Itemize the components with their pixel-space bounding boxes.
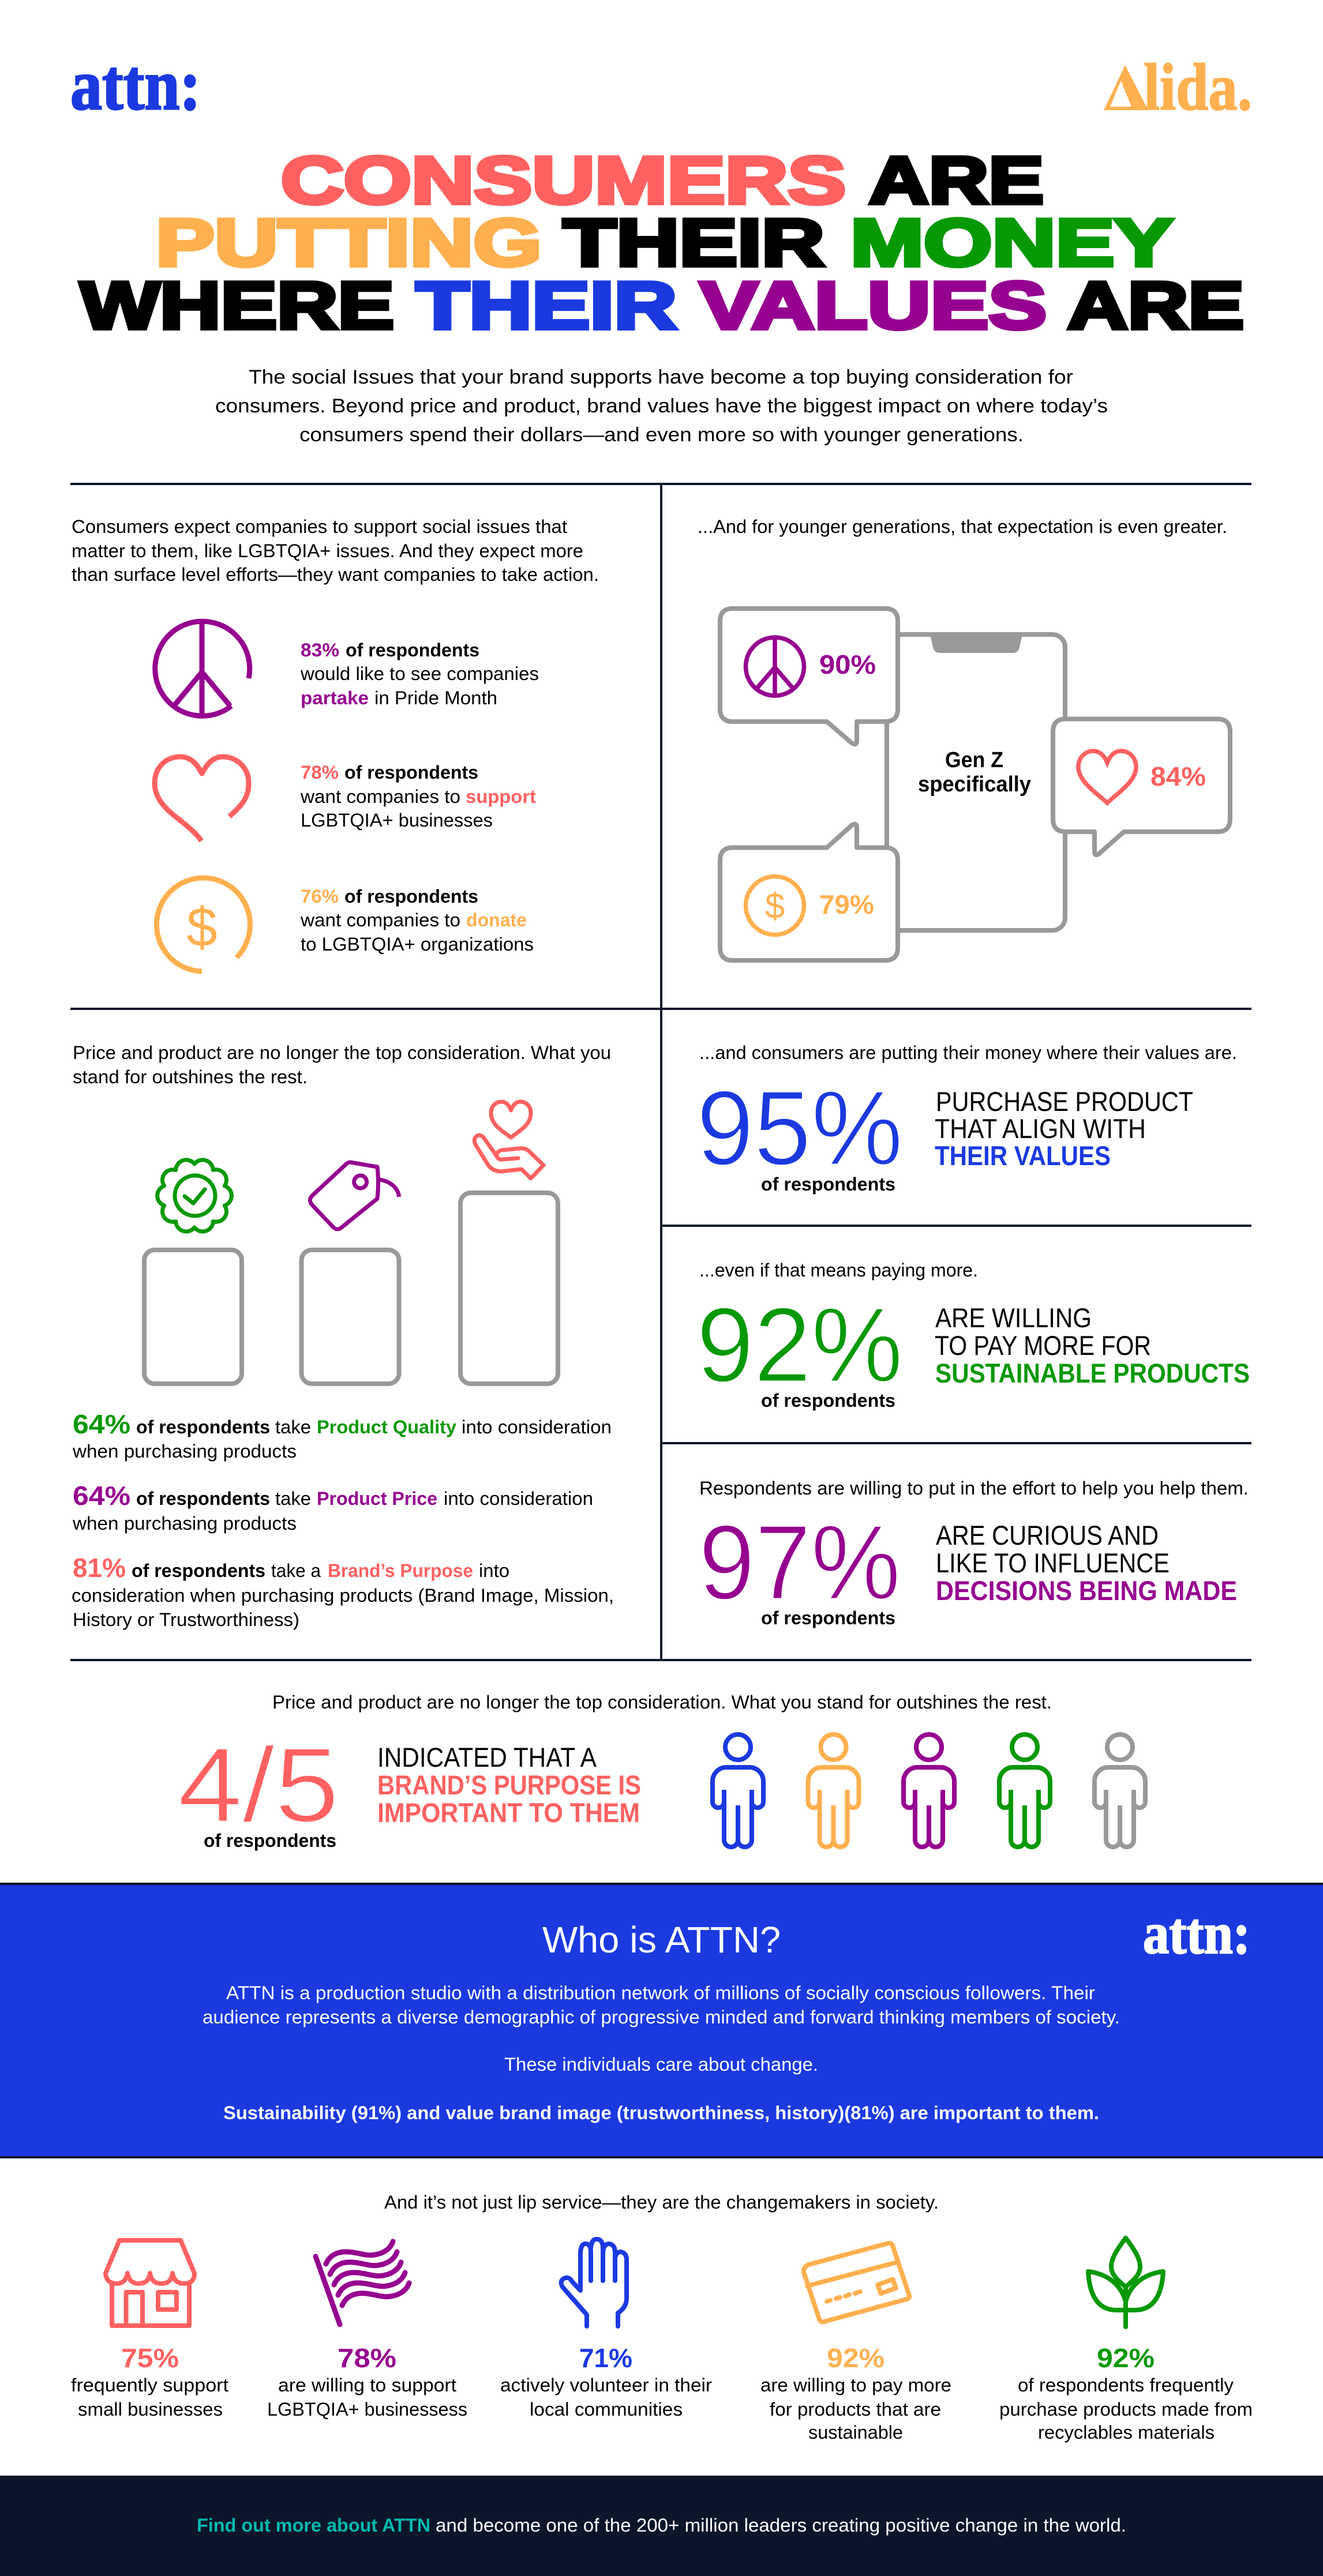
statement: IMPORTANT TO THEM	[377, 1797, 640, 1828]
logo: Alida	[1104, 51, 1252, 125]
speech bubble: heart	[1053, 719, 1230, 855]
column: recyclable materials: purchase products made from	[999, 2399, 1253, 2420]
speech bubble: heart: 84%	[1150, 761, 1206, 791]
icon: person orange	[808, 1734, 859, 1847]
panel: 97 percent: 97%	[699, 1503, 901, 1621]
stat: 83 percent: partake	[301, 688, 369, 708]
intro paragraph: consumers spend their dollars—and even more so with younger generations.	[299, 424, 1024, 446]
column: pay more: sustainable	[808, 2422, 903, 2443]
stat: brand purpose: take a	[271, 1560, 321, 1581]
stat: 76 percent: donate	[466, 910, 527, 930]
footer banner: and become one of the 200+ million leaders creating positive change in the world.	[436, 2515, 1126, 2536]
column: small businesses: small businesses	[78, 2399, 223, 2420]
stat: product quality: when purchasing products	[72, 1441, 297, 1462]
column: small businesses: frequently support	[71, 2375, 228, 2395]
label: Gen Z specifically: specifically	[918, 772, 1031, 797]
stat: 4/5: 4/5	[178, 1725, 339, 1844]
column: volunteer: local communities	[530, 2399, 683, 2420]
panel: 97 percent	[699, 1478, 1249, 1628]
stat: 76 percent	[300, 886, 534, 955]
panel text: than surface level efforts—they want companies to take action.	[72, 564, 599, 585]
description: audience represents a diverse demographic of progressive minded and forward thinking members of society.	[203, 2007, 1120, 2027]
label: Gen Z specifically: Gen Z	[945, 748, 1003, 772]
panel text: stand for outshines the rest.	[73, 1067, 308, 1087]
panel: 92 percent	[696, 1260, 1250, 1411]
description: These individuals care about change.	[504, 2054, 818, 2075]
title: ARE	[869, 143, 1044, 218]
stat: 83 percent: in Pride Month	[374, 688, 497, 708]
panel: 92 percent: ARE WILLING	[935, 1302, 1092, 1333]
bar: brand purpose	[460, 1193, 558, 1384]
stat: 78 percent	[300, 762, 536, 831]
panel: four of five	[178, 1692, 1145, 1851]
panel text: matter to them, like LGBTQIA+ issues. And they expect more	[72, 540, 583, 561]
stat: 76 percent: to LGBTQIA+ organizations	[301, 934, 534, 955]
footer banner	[0, 2476, 1323, 2576]
stat: product quality	[72, 1409, 612, 1462]
title: CONSUMERS	[281, 143, 846, 218]
logo: Alida: lida.	[1144, 51, 1252, 125]
column: volunteer: 71%	[579, 2343, 632, 2373]
stat: brand purpose: History or Trustworthiness)	[73, 1609, 299, 1630]
column: LGBTQIA businesses: 78%	[338, 2343, 396, 2373]
title: THEIR	[416, 268, 677, 343]
panel: 97 percent: DECISIONS BEING MADE	[936, 1575, 1237, 1606]
intro paragraph: consumers. Beyond price and product, brand values have the biggest impact on where today’s	[215, 395, 1108, 417]
icon: person blue	[713, 1734, 763, 1847]
icon: heart	[155, 757, 249, 841]
icon: plant	[1088, 2238, 1163, 2327]
stat: product quality: into consideration	[462, 1417, 612, 1437]
stat: 83 percent: would like to see companies	[300, 663, 539, 684]
stat: brand purpose: Brand’s Purpose	[328, 1560, 473, 1581]
panel: expectations	[72, 516, 599, 971]
label: Gen Z specifically	[918, 748, 1031, 797]
column: volunteer	[500, 2239, 712, 2420]
bar: product quality	[144, 1250, 242, 1384]
panel: 97 percent: ARE CURIOUS AND	[936, 1520, 1159, 1550]
speech bubble: peace	[720, 609, 898, 744]
panel text	[72, 516, 599, 585]
stat: 83 percent: of respondents	[346, 640, 479, 660]
stat: product quality: Product Quality	[317, 1417, 456, 1437]
icon: credit card	[804, 2243, 909, 2322]
panel: 95 percent: THEIR VALUES	[935, 1140, 1111, 1171]
description: Sustainability (91%) and value brand image (trustworthiness, history)(81%) are important to them.	[223, 2102, 1099, 2123]
statement	[377, 1742, 641, 1828]
stat: product price: take	[275, 1488, 311, 1509]
stat: product price: when purchasing products	[72, 1513, 297, 1534]
speech bubble: dollar: $	[765, 887, 785, 926]
panel: 95 percent: 95%	[696, 1068, 903, 1187]
stat: 76 percent: want companies to	[300, 910, 460, 930]
column: pay more: are willing to pay more	[760, 2375, 951, 2395]
stat: 78 percent: support	[466, 786, 536, 807]
icon: dollar coin: $	[186, 896, 218, 958]
icon: storefront	[106, 2240, 194, 2326]
speech bubble: peace: 90%	[819, 649, 876, 679]
description	[203, 1982, 1120, 2123]
icon: dollar coin	[156, 878, 250, 971]
column: recyclable materials: 92%	[1097, 2343, 1155, 2373]
stat: 78 percent: LGBTQIA+ businesses	[301, 810, 493, 831]
panel text: Consumers expect companies to support social issues that	[72, 516, 567, 537]
column: LGBTQIA businesses	[267, 2241, 467, 2420]
panel: who is ATTN	[0, 1883, 1323, 2158]
description: ATTN is a production studio with a distribution network of millions of socially conscious followers. Their	[226, 1982, 1095, 2003]
stat: 78 percent: want companies to	[300, 786, 460, 807]
panel text: ...And for younger generations, that expectation is even greater.	[698, 516, 1227, 537]
panel: 92 percent: SUSTAINABLE PRODUCTS	[935, 1358, 1250, 1388]
title: THEIR	[563, 205, 824, 280]
stat: product price: into consideration	[444, 1488, 593, 1509]
stat: brand purpose	[72, 1553, 614, 1630]
column: pay more: for products that are	[770, 2399, 941, 2420]
column: small businesses	[71, 2240, 228, 2420]
speech bubble: dollar	[720, 824, 898, 960]
panel: 92 percent: TO PAY MORE FOR	[935, 1330, 1151, 1361]
panel: younger generations	[698, 516, 1230, 960]
icon: peace sign	[155, 621, 250, 716]
stat: product quality: of respondents	[136, 1417, 270, 1437]
panel: 92 percent: ...even if that means paying more.	[699, 1260, 978, 1281]
panel text: Price and product are no longer the top consideration. What you	[73, 1042, 611, 1063]
panel: 95 percent: ...and consumers are putting their money where their values are.	[699, 1042, 1237, 1063]
stat: product price: 64%	[73, 1481, 130, 1511]
statement: BRAND’S PURPOSE IS	[377, 1770, 641, 1800]
panel: 95 percent	[696, 1042, 1237, 1195]
stat: 78 percent: of respondents	[344, 762, 478, 783]
icon: price tag	[310, 1162, 399, 1229]
stat: brand purpose: of respondents	[132, 1560, 265, 1581]
stat: brand purpose: 81%	[73, 1553, 126, 1583]
speech bubble: dollar: 79%	[819, 889, 874, 919]
column: LGBTQIA businesses: LGBTQIA+ businessess	[267, 2399, 467, 2420]
stat: 78 percent: 78%	[301, 762, 339, 783]
icon: person purple	[904, 1734, 954, 1847]
panel: 95 percent: of respondents	[761, 1174, 895, 1195]
column: volunteer: actively volunteer in their	[500, 2375, 712, 2395]
panel text	[73, 1042, 611, 1087]
column: small businesses: 75%	[121, 2343, 179, 2373]
icon: raised hand	[561, 2239, 627, 2326]
icon: person gray	[1095, 1734, 1145, 1847]
stat: 76 percent: 76%	[301, 886, 339, 907]
section heading: changemakers: And it’s not just lip service—they are the changemakers in society.	[384, 2192, 939, 2213]
icon: person green	[999, 1734, 1050, 1847]
title: PUTTING	[156, 205, 542, 280]
panel: 92 percent: of respondents	[761, 1390, 895, 1411]
phone illustration	[887, 634, 1065, 930]
intro paragraph	[215, 366, 1108, 446]
panel: 97 percent: LIKE TO INFLUENCE	[936, 1548, 1170, 1578]
column: recyclable materials	[999, 2238, 1253, 2443]
title: ARE	[1067, 268, 1244, 343]
stat: brand purpose: into	[479, 1560, 509, 1581]
stat: 83 percent: 83%	[301, 640, 339, 660]
column: pay more: 92%	[827, 2343, 885, 2373]
icon: heart in hand	[474, 1102, 544, 1178]
panel: 95 percent: PURCHASE PRODUCT	[936, 1086, 1193, 1117]
column: recyclable materials: recyclables materials	[1038, 2422, 1215, 2443]
statement: INDICATED THAT A	[377, 1742, 597, 1773]
title: WHERE	[80, 268, 394, 343]
panel: 97 percent: Respondents are willing to put in the effort to help you help them.	[699, 1478, 1249, 1499]
panel: purchase considerations	[72, 1042, 614, 1630]
footer banner: Find out more about ATTN	[197, 2515, 430, 2536]
heading: Price and product are no longer the top consideration. What you stand for outshines the rest.	[272, 1692, 1052, 1713]
column: pay more	[760, 2243, 951, 2443]
title: MONEY	[850, 205, 1173, 280]
panel: 92 percent: 92%	[696, 1285, 903, 1404]
stat: brand purpose: consideration when purchasing products (Brand Image, Mission,	[72, 1585, 614, 1606]
intro paragraph: The social Issues that your brand supports have become a top buying consideration for	[249, 366, 1073, 388]
column: recyclable materials: of respondents frequently	[1018, 2375, 1234, 2395]
panel: 97 percent: of respondents	[761, 1608, 895, 1628]
logo: attn white: attn:	[1143, 1901, 1250, 1966]
title: VALUES	[700, 268, 1047, 343]
stat: product quality: take	[275, 1417, 311, 1437]
icon: flag	[316, 2241, 409, 2325]
bar: product price	[301, 1250, 399, 1384]
column: LGBTQIA businesses: are willing to support	[278, 2375, 456, 2395]
stat: product price: Product Price	[317, 1488, 437, 1509]
stat: product quality: 64%	[73, 1409, 130, 1439]
stat: 76 percent: of respondents	[344, 886, 478, 907]
panel: 95 percent: THAT ALIGN WITH	[935, 1113, 1146, 1144]
icon: quality badge	[158, 1160, 231, 1231]
stat: product price	[72, 1481, 593, 1534]
stat: 83 percent	[300, 640, 539, 708]
heading: Who is ATTN?	[542, 1919, 781, 1961]
title	[80, 143, 1244, 343]
stat: 4/5: of respondents	[204, 1830, 336, 1851]
stat: product price: of respondents	[136, 1488, 270, 1509]
logo: attn: attn:	[70, 46, 201, 125]
